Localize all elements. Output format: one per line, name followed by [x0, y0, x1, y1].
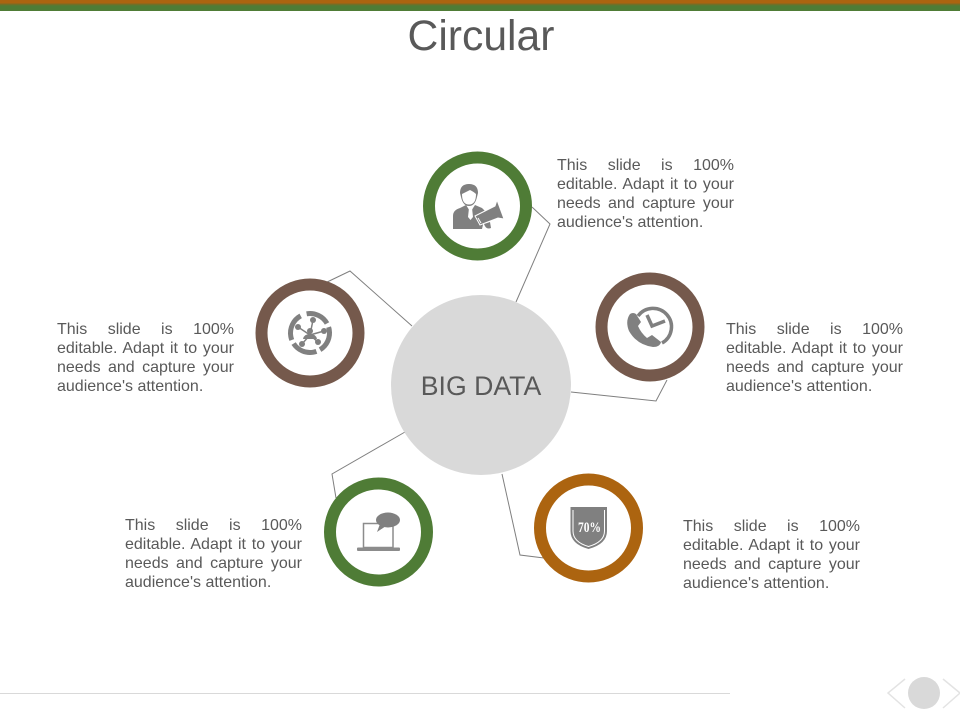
text block: left: This slide is 100% editable. Adapt it to your needs and capture your audience's attention.: [57, 321, 234, 395]
icon: laptop with speech bubble: [357, 512, 400, 551]
text block: top: This slide is 100% editable. Adapt it to your needs and capture your audience's attention.: [557, 157, 734, 231]
ring: bottom right orange: [540, 480, 637, 576]
icon: 70% shield: 70%: [578, 520, 601, 536]
icon: businessman with megaphone: [453, 184, 504, 229]
connector: left: [323, 271, 412, 326]
center hub: big data: BIG DATA: [421, 371, 541, 401]
title: Circular: [408, 12, 554, 60]
connector: top: [516, 207, 550, 302]
ring: right brown: [602, 278, 698, 376]
text block: bottom left: This slide is 100% editable. Adapt it to your needs and capture your audience's attention.: [125, 517, 302, 591]
navigation control: [888, 677, 960, 709]
connector: right: [571, 380, 667, 401]
center hub: big data: [391, 295, 571, 475]
top colour band: [0, 0, 960, 11]
text block: bottom right: This slide is 100% editable. Adapt it to your needs and capture your audience's attention.: [683, 518, 860, 592]
text block: right: This slide is 100% editable. Adapt it to your needs and capture your audience's attention.: [726, 321, 903, 395]
connector: bottom right: [502, 474, 544, 558]
ring: left brown: [262, 284, 358, 382]
ring: bottom left green: [330, 484, 427, 580]
icon: phone and clock: [627, 308, 671, 347]
footer rule: [0, 692, 730, 694]
icon: 70% shield: [570, 507, 607, 549]
icon: network circle: [287, 310, 333, 356]
connector: bottom left: [332, 432, 405, 498]
ring: top green: [429, 158, 526, 254]
